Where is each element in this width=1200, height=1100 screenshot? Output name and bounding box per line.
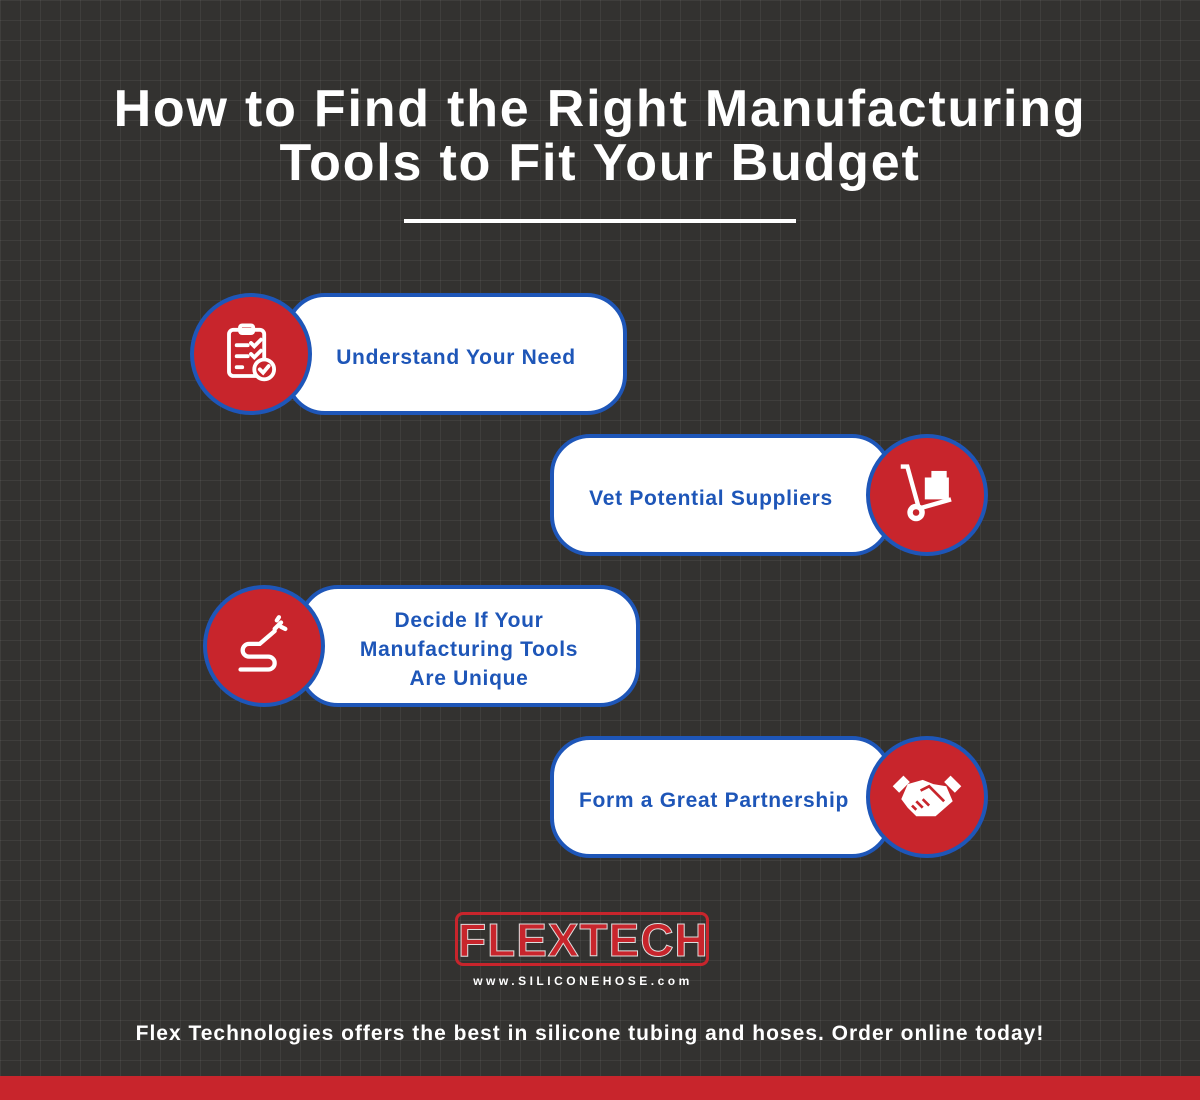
item 1: understand your need — [190, 293, 627, 415]
title underline — [404, 219, 796, 223]
icon: clipboard — [190, 293, 312, 415]
title: How to Find the Right Manufacturing — [114, 80, 1086, 138]
pill text: Decide If Your — [394, 608, 544, 632]
title — [114, 80, 1086, 192]
footer text: Flex Technologies offers the best in silicone tubing and hoses. Order online today! — [136, 1022, 1044, 1045]
pill text: Understand Your Need — [336, 346, 576, 368]
pill text — [550, 434, 892, 556]
icon: handshake — [866, 736, 988, 858]
pill text — [550, 736, 892, 858]
item 3: decide if tools are unique — [203, 585, 640, 707]
pill text: Form a Great Partnership — [579, 788, 849, 812]
logo wordmark: FLEXTECH — [458, 914, 709, 966]
pill text — [285, 293, 627, 415]
pill text: Vet Potential Suppliers — [589, 486, 833, 510]
logo url: www.SILICONEHOSE.com — [473, 974, 693, 988]
title: Tools to Fit Your Budget — [279, 134, 921, 192]
pill text: Manufacturing Tools — [360, 638, 578, 660]
icon: hose — [203, 585, 325, 707]
item 4: form a great partnership — [550, 736, 988, 858]
icon: hand truck — [866, 434, 988, 556]
pill text: Are Unique — [409, 666, 528, 690]
item 2: vet potential suppliers — [550, 434, 988, 556]
pill text — [298, 585, 640, 707]
logo: flextech — [455, 912, 709, 988]
footer red bar — [0, 1076, 1200, 1100]
